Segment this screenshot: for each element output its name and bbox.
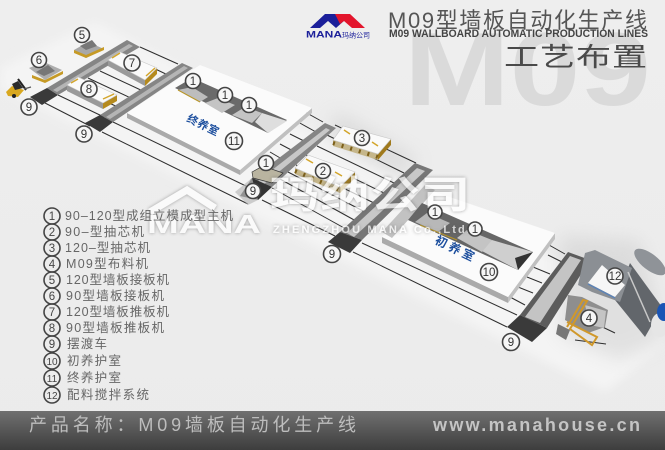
number markers: 8 — [86, 84, 92, 96]
floor shadows — [330, 115, 665, 360]
legend: 7 — [49, 307, 55, 319]
legend: 1 — [49, 211, 55, 223]
shuttle cars — [30, 88, 547, 342]
number markers: 1 — [263, 158, 269, 170]
number markers: 6 — [36, 55, 42, 67]
room label: 初养室 — [433, 232, 477, 264]
watermark: company logo: MANA — [147, 209, 261, 239]
legend: 11 — [47, 374, 58, 385]
number markers — [21, 28, 623, 350]
legend: 10 — [46, 357, 58, 368]
machine 1 on rail — [252, 166, 283, 183]
logo: MANA — [306, 30, 343, 40]
machine 7 — [108, 52, 157, 86]
number markers: 1 — [432, 207, 438, 219]
subtitle: M09 WALLBOARD AUTOMATIC PRODUCTION LINES — [389, 28, 648, 40]
bottom bar — [0, 411, 665, 450]
legend: 初养护室 — [67, 353, 121, 368]
legend: 120型墙板接板机 — [66, 272, 169, 287]
machine 6 — [29, 62, 63, 83]
website: www.manahouse.cn — [432, 415, 640, 435]
legend: 90型墙板推板机 — [66, 321, 164, 335]
watermark: company logo — [147, 174, 470, 239]
legend: 终养护室 — [67, 370, 121, 385]
legend: 3 — [49, 243, 55, 255]
number markers: 9 — [26, 102, 32, 114]
legend: 120–型抽芯机 — [65, 241, 150, 255]
machine 5 — [74, 40, 104, 58]
heading: process layout: 工艺布置 — [504, 42, 647, 72]
legend: 5 — [49, 275, 55, 287]
legend: M09型布料机 — [66, 257, 148, 271]
rails: middle section — [262, 125, 416, 236]
logo: 玛纳公司 — [342, 30, 370, 40]
machine 4 — [556, 295, 608, 345]
transfer rails — [47, 40, 590, 328]
number markers: 1 — [246, 100, 252, 112]
number markers: 12 — [609, 271, 621, 283]
machine 3 — [333, 126, 391, 160]
product name: 产品名称：M09墙板自动化生产线 — [29, 415, 356, 435]
number markers: 11 — [228, 136, 240, 148]
number markers: 4 — [586, 313, 593, 325]
watermark: company logo: 玛纳公司 — [270, 174, 470, 217]
number markers: 5 — [79, 30, 85, 42]
initial curing room 10 — [382, 185, 555, 303]
number markers: 1 — [472, 224, 478, 236]
room label: 终养室 — [185, 111, 221, 139]
legend: 配料搅拌系统 — [67, 387, 149, 402]
number markers: 7 — [129, 58, 135, 70]
legend: 8 — [49, 323, 55, 335]
number markers: 2 — [320, 166, 326, 178]
final curing room 11 — [127, 65, 312, 175]
machine 12: batching system — [578, 244, 665, 337]
legend: 6 — [49, 291, 55, 303]
legend: 120型墙板推板机 — [66, 305, 169, 319]
watermark: M09: M09 — [404, 12, 651, 128]
number markers: 9 — [250, 186, 256, 198]
legend: 9 — [49, 339, 55, 351]
rails: right section — [353, 243, 615, 344]
watermark: company logo: ZHENGZHOU MANA Co.,Ltd. — [273, 224, 470, 236]
number markers: 1 — [222, 90, 228, 102]
legend: 90–型抽芯机 — [65, 225, 144, 239]
logo — [306, 14, 370, 40]
title: M09型墙板自动化生产线 — [388, 8, 647, 33]
number markers: 1 — [190, 76, 196, 88]
number markers: 9 — [508, 337, 514, 349]
number markers: 10 — [483, 267, 495, 279]
legend: 90型墙板接板机 — [66, 288, 164, 303]
machine 8 — [67, 77, 117, 109]
forklift — [6, 79, 31, 98]
number markers: 3 — [359, 133, 365, 145]
legend: 摆渡车 — [67, 336, 107, 351]
legend: 2 — [49, 227, 55, 239]
machine 2 — [295, 155, 355, 193]
legend: 90–120型成组立模成型主机 — [65, 208, 233, 223]
legend: 12 — [46, 391, 58, 402]
number markers: 9 — [81, 129, 87, 141]
legend: 4 — [49, 259, 56, 271]
number markers: 9 — [329, 249, 335, 261]
legend — [44, 208, 233, 403]
rails: left section — [45, 47, 323, 204]
